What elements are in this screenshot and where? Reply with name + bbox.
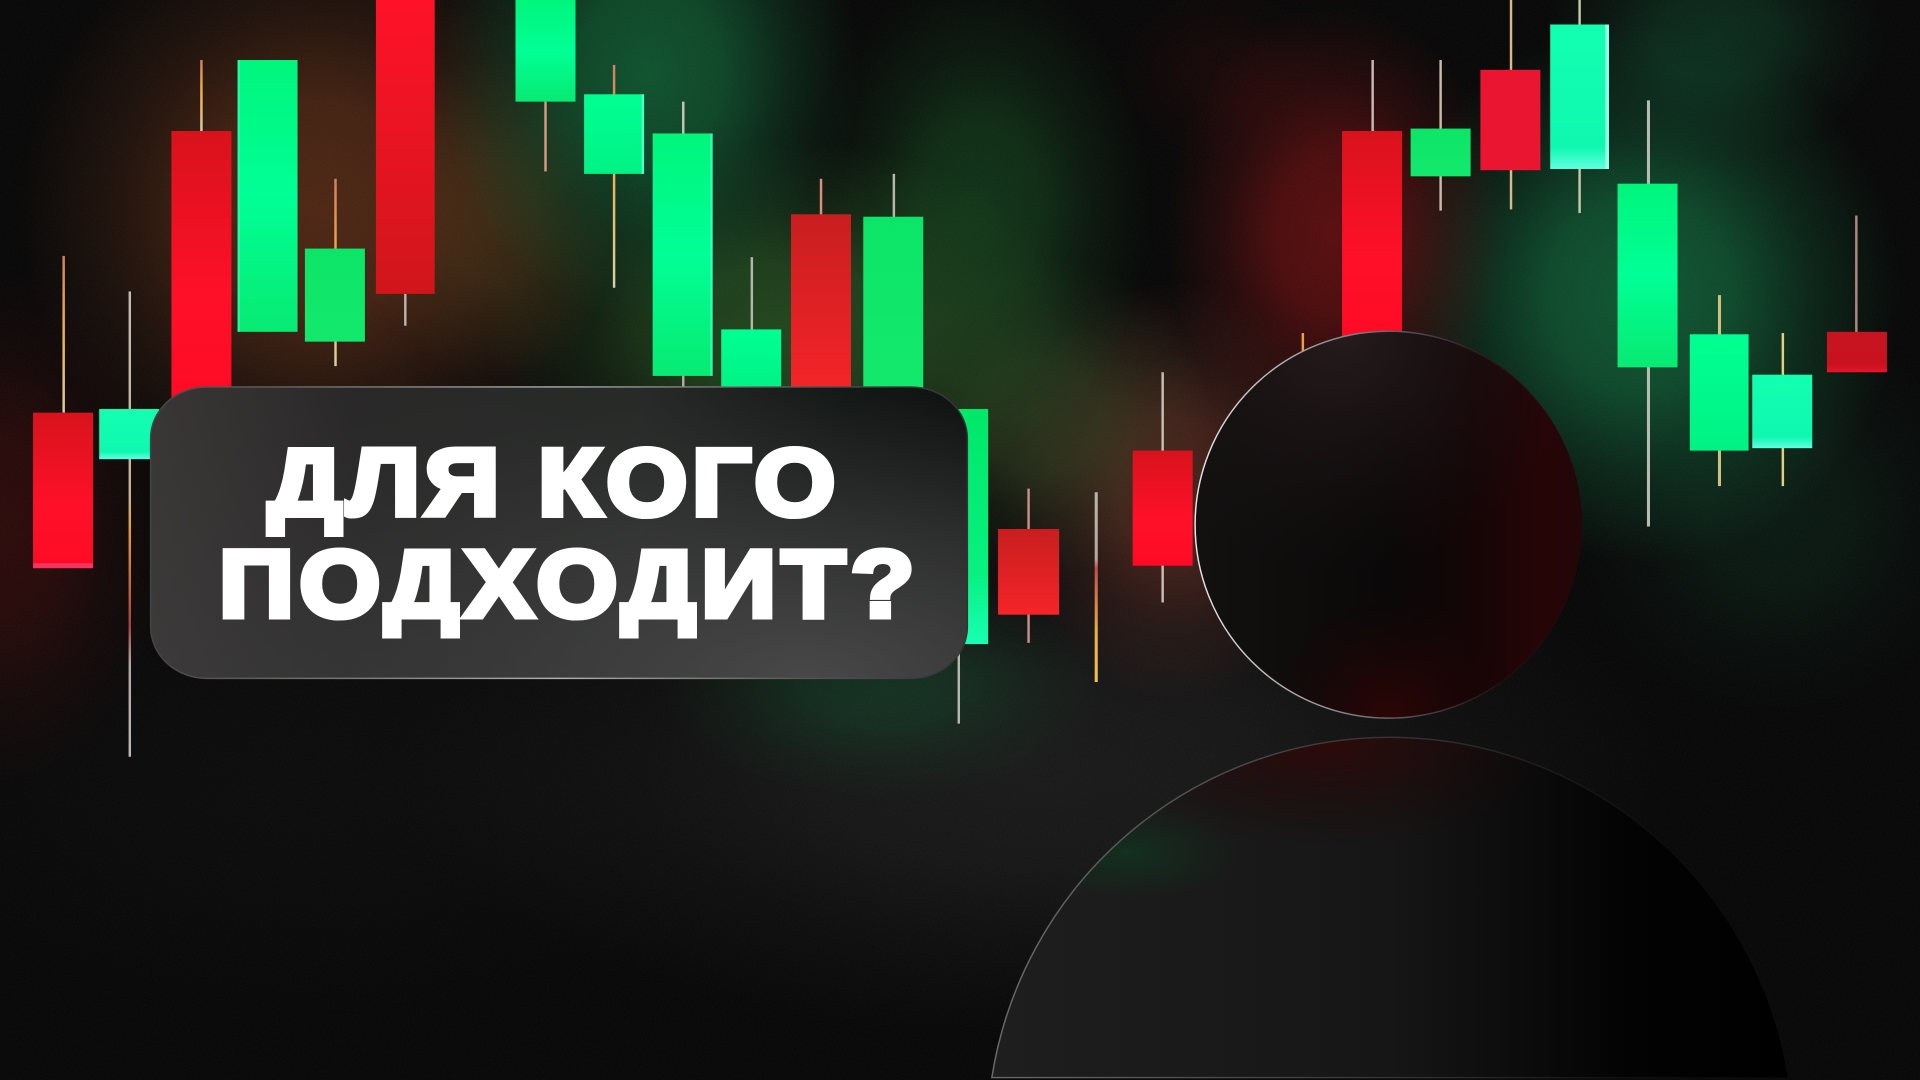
candle 24 teal [1752, 333, 1812, 486]
candle 22 green [1618, 100, 1678, 527]
candle 17 wick only [1302, 333, 1304, 353]
heading: line 2: ПОДХОДИТ? [219, 532, 914, 637]
candle 23 green [1690, 295, 1749, 486]
candle 3 red [171, 60, 231, 407]
candle 18 red [1342, 60, 1402, 339]
candle 21 teal [1550, 0, 1609, 213]
candle 7 green [516, 0, 576, 171]
candle 6 red [376, 0, 435, 326]
candle 14 red [998, 489, 1059, 643]
candle 15 wick only [1095, 492, 1098, 682]
candle 10 green [721, 257, 781, 391]
person body [992, 737, 1788, 1078]
candle 11 red [791, 179, 851, 392]
person head [1195, 331, 1582, 718]
icon: person silhouette [992, 331, 1788, 1078]
candle 20 red [1480, 0, 1540, 209]
candlestick chart: left cluster [33, 0, 1193, 757]
candle 4 green [238, 60, 298, 332]
candle 2 green [99, 291, 159, 757]
candle 25 red [1827, 216, 1887, 372]
candle 5 green [305, 179, 365, 366]
panel: heading card [151, 387, 967, 678]
candle 8 green [584, 65, 644, 288]
candle 12 green [863, 174, 923, 392]
candle 1 red [33, 256, 93, 568]
candle 13 green [928, 409, 988, 724]
heading: line 1: ДЛЯ КОГО [268, 430, 835, 536]
candle 16 red [1133, 372, 1193, 602]
candlestick chart: right cluster [1302, 0, 1887, 527]
candle 9 green [653, 102, 713, 396]
candle 19 green [1411, 60, 1471, 211]
